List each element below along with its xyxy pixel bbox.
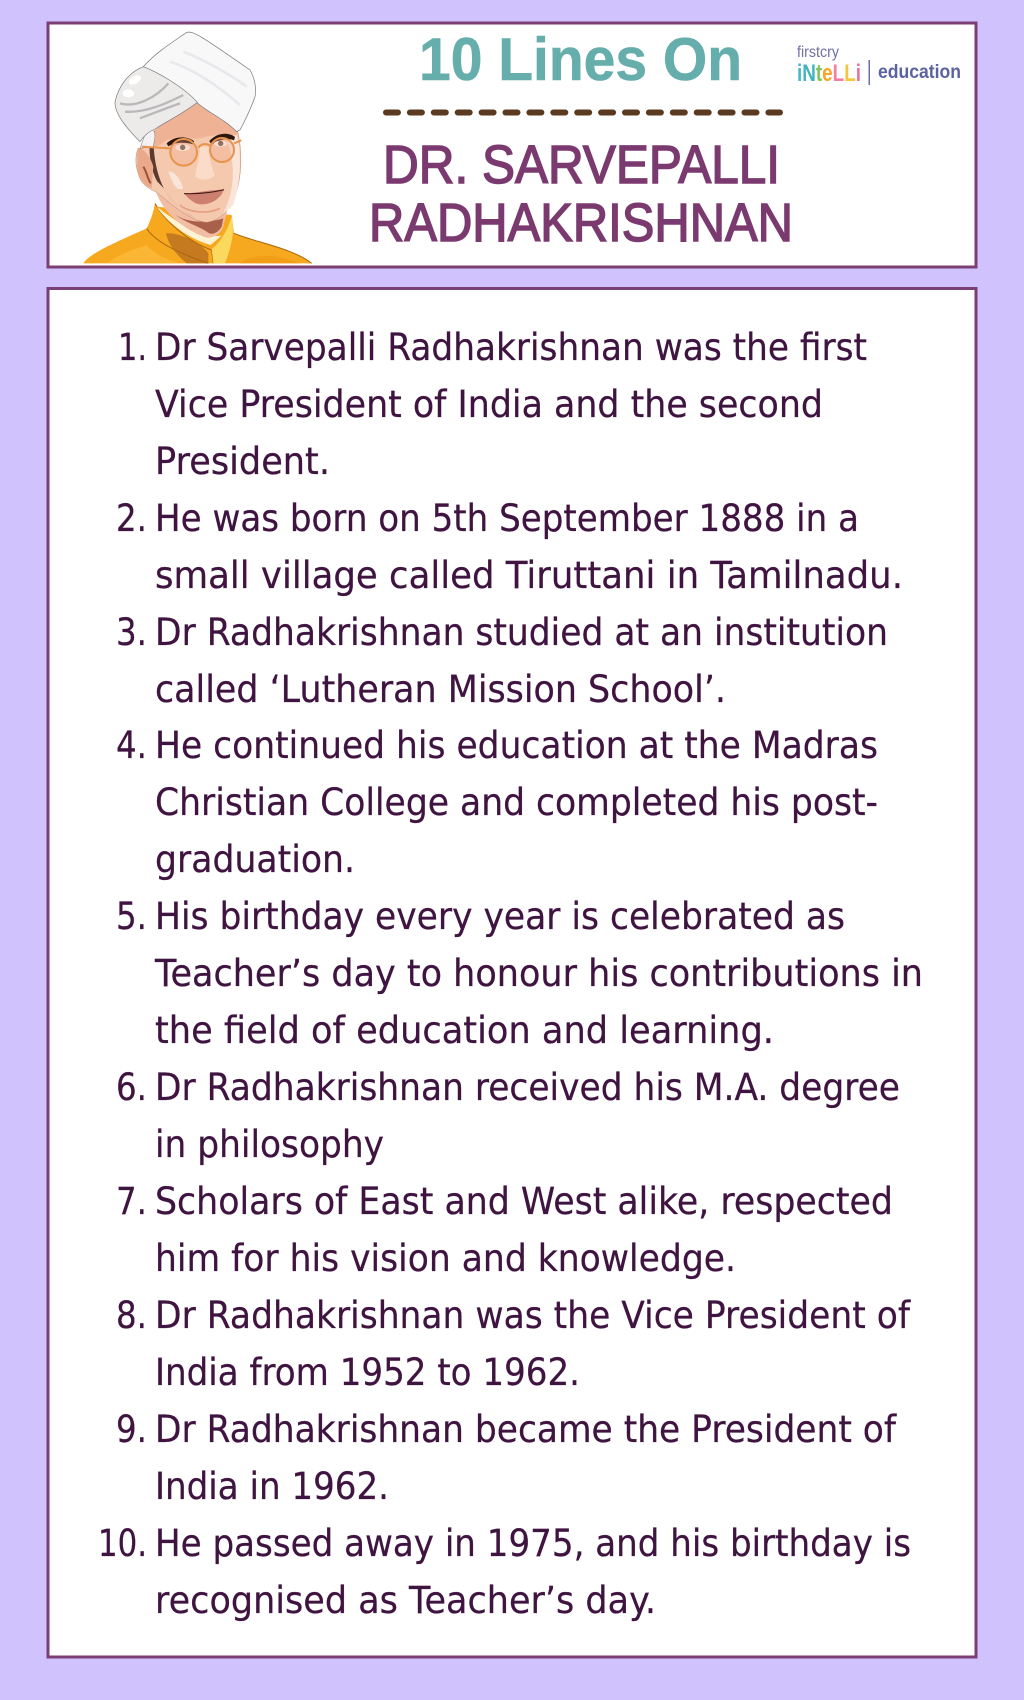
line 7: 7. — [116, 1179, 147, 1223]
line 1 — [118, 325, 867, 483]
line 8: India from 1952 to 1962. — [155, 1350, 580, 1394]
line 9: India in 1962. — [155, 1464, 389, 1508]
line 4: 4. — [116, 723, 147, 767]
line 5 — [116, 894, 923, 1052]
line 3: Dr Radhakrishnan studied at an institution — [155, 610, 888, 654]
line 6: in philosophy — [155, 1122, 384, 1166]
line 7 — [116, 1179, 893, 1280]
line 10: recognised as Teacher’s day. — [155, 1578, 656, 1622]
panel: ten lines list — [48, 288, 976, 1657]
line 9: Dr Radhakrishnan became the President of — [155, 1407, 897, 1451]
logo: firstcry intelli education: firstcry — [797, 44, 839, 61]
line 8 — [116, 1293, 911, 1394]
heading: name — [369, 135, 793, 253]
line 10: He passed away in 1975, and his birthday is — [155, 1521, 911, 1565]
line 3 — [116, 610, 888, 711]
line 1: Vice President of India and the second — [155, 382, 823, 426]
line 2: 2. — [116, 496, 147, 540]
logo: firstcry intelli education: education — [878, 62, 961, 83]
line 6: 6. — [116, 1065, 147, 1109]
line 1: President. — [155, 439, 330, 483]
line 1: Dr Sarvepalli Radhakrishnan was the first — [155, 325, 867, 369]
line 6 — [116, 1065, 900, 1166]
line 2: small village called Tiruttani in Tamilnadu. — [155, 553, 903, 597]
heading: name: RADHAKRISHNAN — [369, 193, 793, 253]
line 8: 8. — [116, 1293, 147, 1337]
line 4: graduation. — [155, 837, 355, 881]
title: 10 Lines On: 10 Lines On — [419, 26, 742, 93]
line 7: Scholars of East and West alike, respected — [155, 1179, 893, 1223]
line 6: Dr Radhakrishnan received his M.A. degree — [155, 1065, 900, 1109]
line 8: Dr Radhakrishnan was the Vice President of — [155, 1293, 911, 1337]
logo: firstcry intelli education — [797, 44, 961, 87]
line 5: the field of education and learning. — [155, 1008, 774, 1052]
line 2 — [116, 496, 903, 597]
line 5: His birthday every year is celebrated as — [155, 894, 845, 938]
logo: firstcry intelli education: iNteLLi — [797, 60, 861, 87]
line 2: He was born on 5th September 1888 in a — [155, 496, 859, 540]
icon: portrait of Dr Radhakrishnan — [83, 32, 312, 263]
line 3: 3. — [116, 610, 147, 654]
line 4 — [116, 723, 878, 881]
line 3: called ‘Lutheran Mission School’. — [155, 667, 726, 711]
line 9: 9. — [116, 1407, 147, 1451]
line 10 — [98, 1521, 911, 1622]
line 9 — [116, 1407, 897, 1508]
heading: name: DR. SARVEPALLI — [383, 135, 780, 195]
line 10: 10. — [98, 1521, 147, 1565]
panel: header — [48, 23, 976, 267]
line 5: 5. — [116, 894, 147, 938]
line 4: He continued his education at the Madras — [155, 723, 878, 767]
line 7: him for his vision and knowledge. — [155, 1236, 736, 1280]
line 1: 1. — [118, 325, 147, 369]
dashed divider — [386, 110, 780, 116]
line 5: Teacher’s day to honour his contributions in — [154, 951, 923, 995]
line 4: Christian College and completed his post- — [155, 780, 878, 824]
